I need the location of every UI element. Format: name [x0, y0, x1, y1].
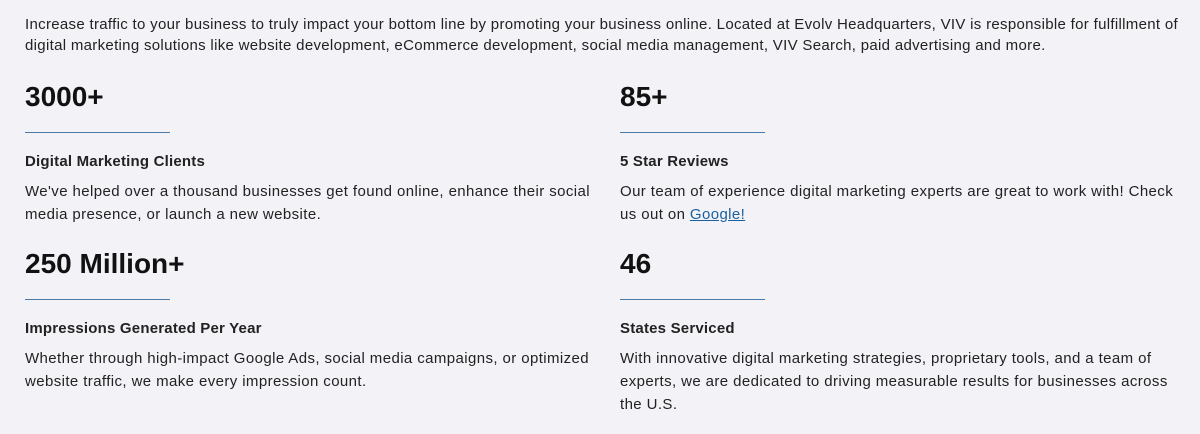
stat: 46: States Serviced — [620, 320, 735, 337]
stat: 3000+: We've helped over a thousand businesses get found online, enhance their social media presence, or launch a new website. — [25, 183, 590, 223]
stat: 3000+: 3000+ — [25, 81, 104, 112]
stat: 250 Million+ — [25, 248, 589, 390]
stat: 250 Million+: 250 Million+ — [25, 248, 184, 279]
stat: 46: With innovative digital marketing strategies, proprietary tools, and a team of experts, we are dedicated to driving measurable results for businesses across the U.S. — [620, 350, 1168, 413]
stat: 85+ — [620, 81, 1173, 223]
stat: 85+: Our team of experience digital marketing experts are great to work with! Check us out on Google! — [620, 183, 1173, 223]
stat: 46: 46 — [620, 248, 651, 279]
stat: 85+: 5 Star Reviews — [620, 153, 729, 170]
stat: 85+: 85+ — [620, 81, 668, 112]
stat: 3000+ — [25, 81, 590, 223]
stat: 250 Million+: Whether through high-impact Google Ads, social media campaigns, or optimized website traffic, we make every impression count. — [25, 350, 589, 390]
stat: 3000+: Digital Marketing Clients — [25, 153, 205, 170]
stat: 250 Million+: Impressions Generated Per Year — [25, 320, 262, 337]
stat: 46 — [620, 248, 1168, 413]
intro text: Increase traffic to your business to truly impact your bottom line by promoting your business online. Located at Evolv Headquarters, VIV is responsible for fulfillment of digital marketing solutions like website development, eCommerce development, social media management, VIV Search, paid advertising and more. — [25, 16, 1178, 54]
